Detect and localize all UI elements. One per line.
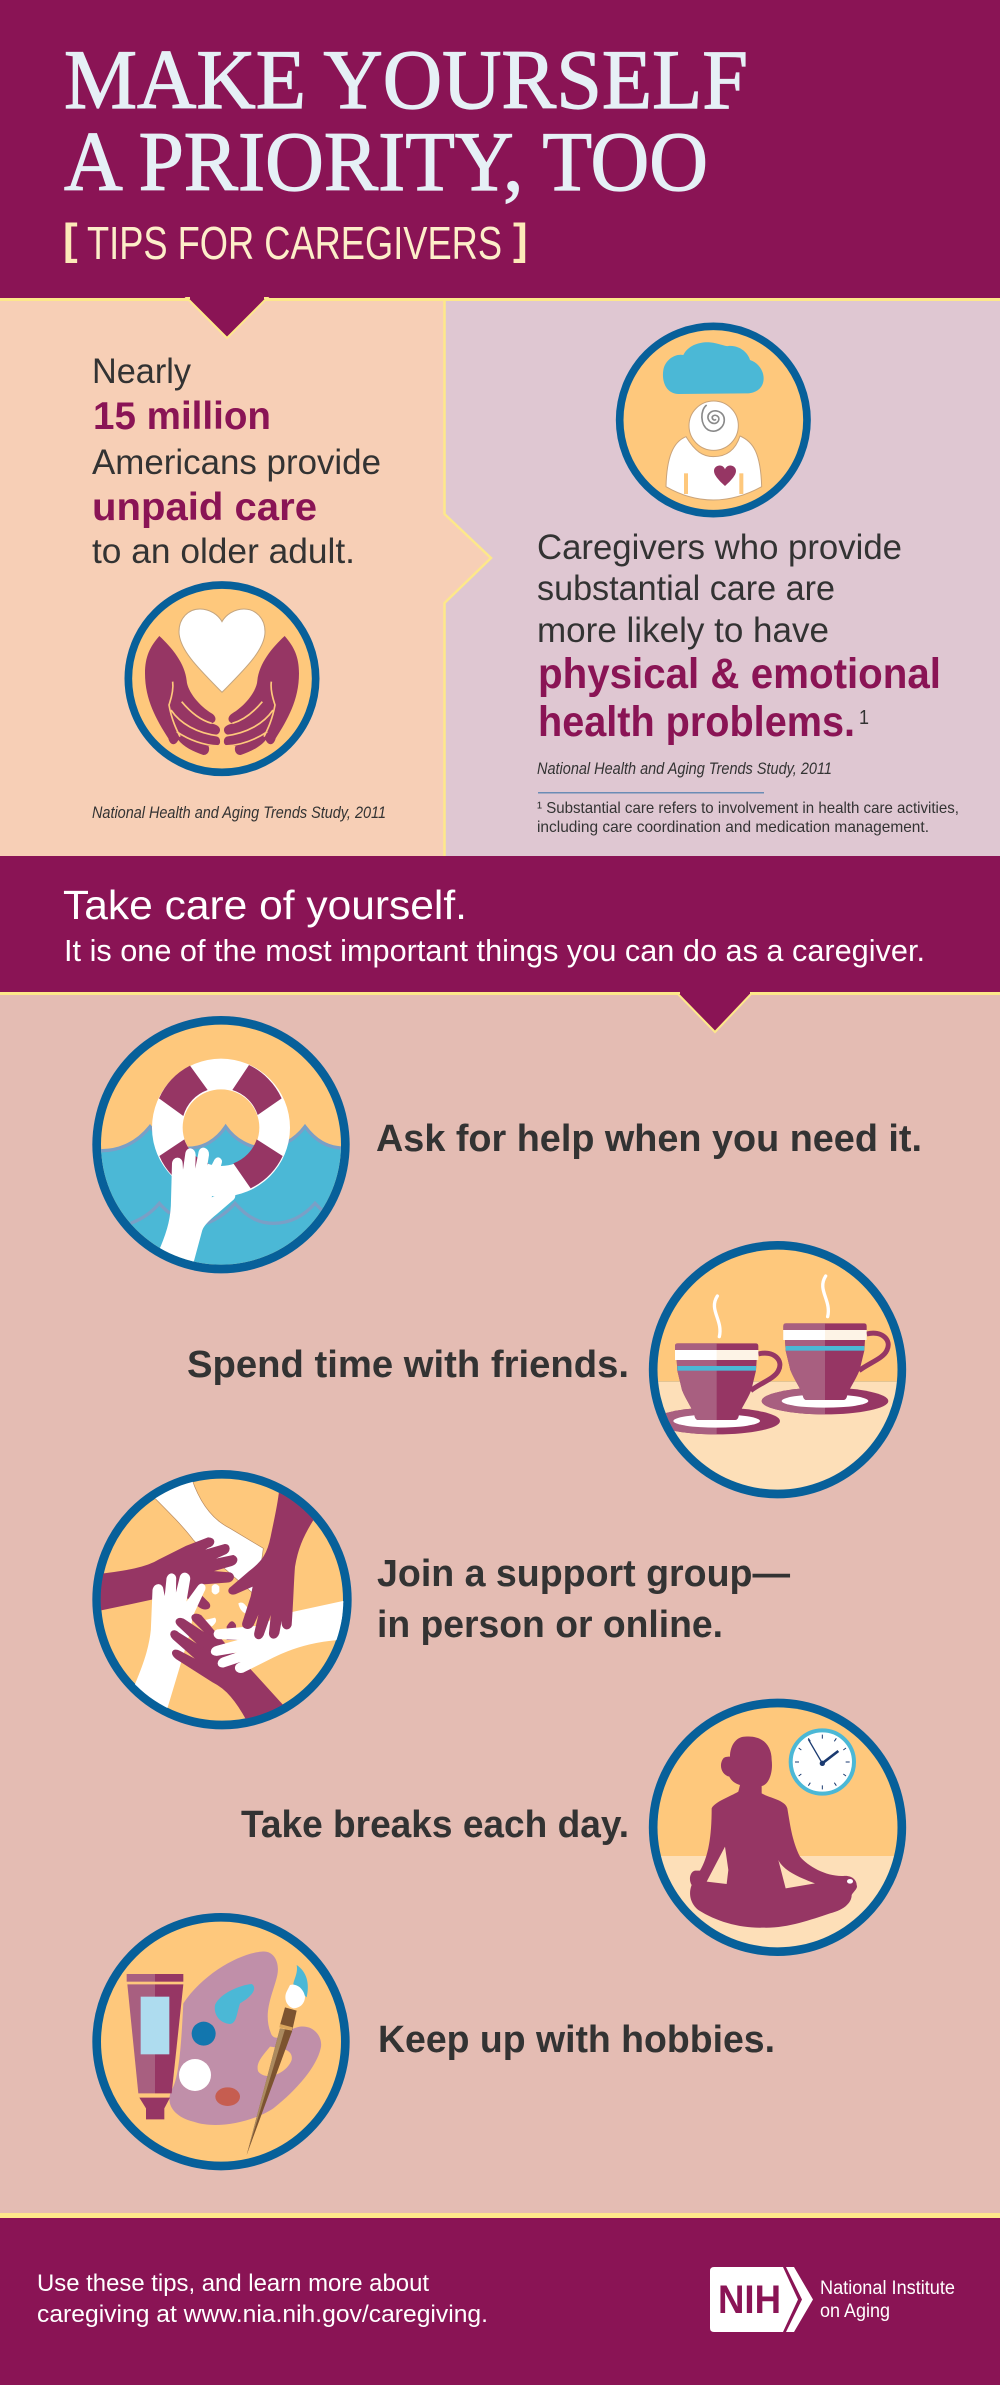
tip: keep up with hobbies: Keep up with hobbies. xyxy=(378,2019,775,2061)
panel: tips background xyxy=(0,993,1000,2215)
text block: 15 million: 15 million xyxy=(93,395,271,438)
arrow: header pointer xyxy=(187,298,267,338)
text block: health problems: substantial care are xyxy=(537,569,835,608)
title: A PRIORITY, TOO xyxy=(64,115,708,209)
text block: 15 million xyxy=(92,352,381,571)
logo text: National Institute on Aging: on Aging xyxy=(820,2301,890,2322)
header panel xyxy=(0,0,1000,300)
tip: take breaks: Take breaks each day. xyxy=(241,1804,629,1846)
text block: health problems: Caregivers who provide xyxy=(537,528,902,567)
text block: health problems: more likely to have xyxy=(537,611,829,650)
footer text xyxy=(37,2270,488,2328)
panel: right statistics background xyxy=(444,300,1000,857)
footnote: ¹ Substantial care refers to involvement in health care activities, xyxy=(537,800,959,817)
logo text: National Institute on Aging: National Institute xyxy=(820,2278,955,2299)
logo: NIH xyxy=(710,2267,813,2332)
title xyxy=(64,33,748,209)
panel: left statistics background xyxy=(0,300,491,857)
footnote: including care coordination and medication management. xyxy=(537,819,929,836)
footer text: Use these tips, and learn more about xyxy=(37,2270,429,2297)
text block: 15 million: unpaid care xyxy=(92,486,317,529)
logo text: National Institute on Aging xyxy=(820,2278,955,2322)
footnote xyxy=(537,800,959,836)
icon: paint palette, tube and brush xyxy=(97,1917,345,2166)
icon: meditating woman and clock xyxy=(649,1699,907,1956)
title: MAKE YOURSELF xyxy=(64,33,748,127)
tip: join a support group: in person or online. xyxy=(377,1604,723,1646)
subtitle: [ xyxy=(63,215,78,264)
tip: ask for help: Ask for help when you need it. xyxy=(376,1118,922,1160)
heading: Take care of yourself. xyxy=(63,882,467,928)
icon: life ring and hand xyxy=(92,1016,350,1277)
text block: health problems: health problems. xyxy=(538,698,855,746)
tip: join a support group: Join a support group— xyxy=(377,1553,790,1595)
tip: spend time with friends: Spend time with friends. xyxy=(187,1344,629,1386)
citation: left: National Health and Aging Trends Study, 2011 xyxy=(92,804,386,822)
text block: 15 million: to an older adult. xyxy=(92,532,355,571)
icon: two tea cups xyxy=(649,1240,907,1502)
icon: hands together xyxy=(97,1474,347,1725)
logo: NIH: NIH xyxy=(718,2278,781,2322)
text block: health problems xyxy=(537,528,941,746)
footer text: caregiving at www.nia.nih.gov/caregiving. xyxy=(37,2301,488,2328)
text block: 15 million: Americans provide xyxy=(92,443,381,482)
tip: join a support group xyxy=(377,1553,790,1646)
subtitle: ] xyxy=(513,215,528,264)
text block: health problems: physical & emotional xyxy=(538,650,941,698)
subtitle: TIPS FOR CAREGIVERS xyxy=(87,217,502,269)
panel: take care band xyxy=(0,856,1000,1032)
citation: right: National Health and Aging Trends Study, 2011 xyxy=(537,760,832,778)
panel: footer xyxy=(0,2213,1000,2385)
text block: health problems: 1 xyxy=(859,707,869,729)
icon: hands holding heart xyxy=(128,585,316,772)
header divider and panel arrow line xyxy=(444,301,491,857)
text block: 15 million: Nearly xyxy=(92,352,191,391)
subheading: It is one of the most important things you can do as a caregiver. xyxy=(64,933,925,968)
icon: stressed person under cloud xyxy=(620,326,807,514)
